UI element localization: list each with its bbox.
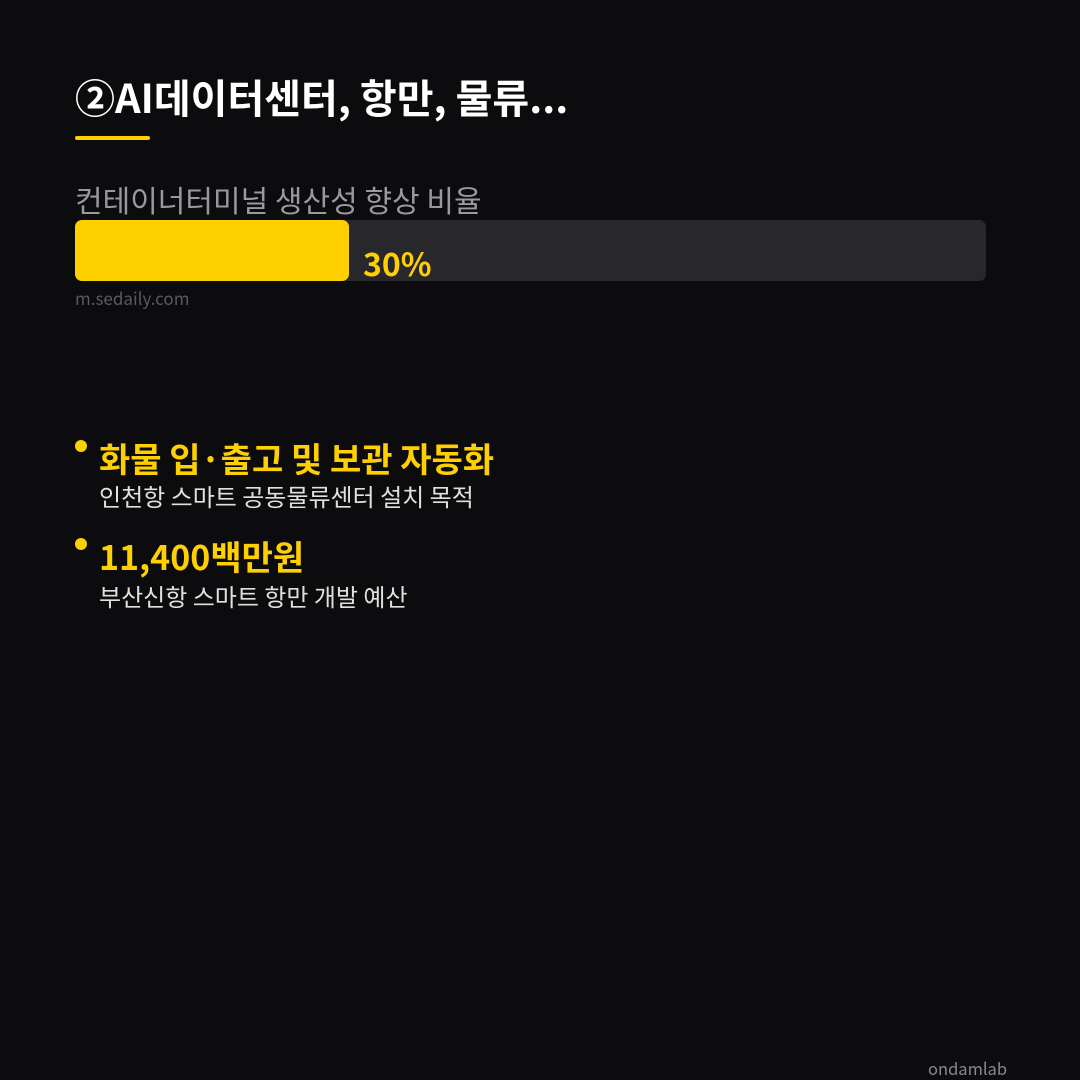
footer brand: ondamlab (928, 1056, 1007, 1080)
item 1 (75, 433, 494, 513)
bullet (75, 538, 87, 550)
item 2: 11,400백만원 (99, 531, 304, 580)
bar fill (75, 220, 349, 281)
bar chart (75, 220, 986, 281)
source: m.sedaily.com (75, 285, 189, 310)
bar label: 컨테이너터미널 생산성 향상 비율 (75, 177, 482, 221)
bar value: 30% (363, 240, 432, 286)
title underline (75, 136, 150, 140)
item 1: 인천항 스마트 공동물류센터 설치 목적 (99, 478, 474, 513)
item 2: 부산신항 스마트 항만 개발 예산 (99, 578, 408, 613)
bullet (75, 440, 87, 452)
item 1: 화물 입·출고 및 보관 자동화 (99, 433, 494, 482)
item 2 (75, 531, 408, 613)
title: ②AI데이터센터, 항만, 물류... (75, 67, 568, 125)
